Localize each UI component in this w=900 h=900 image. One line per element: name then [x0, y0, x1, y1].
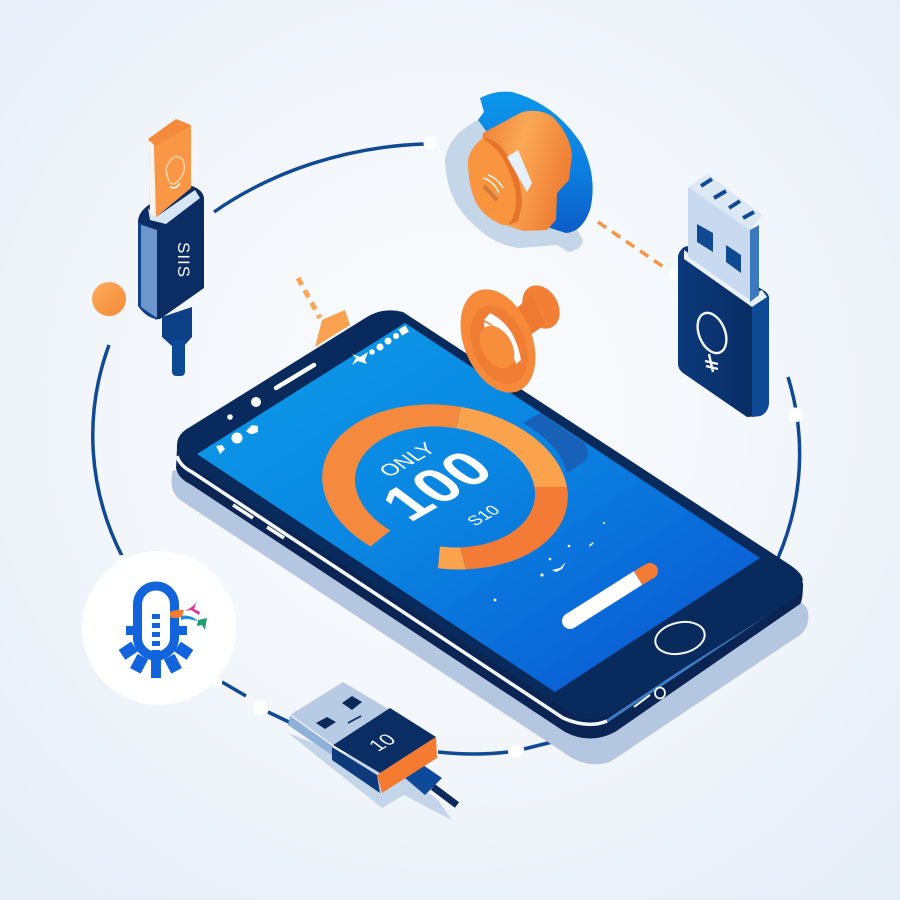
phone face — [177, 310, 803, 718]
smartphone — [176, 310, 803, 738]
connector label: SIIS — [174, 242, 193, 278]
side buttons — [233, 505, 284, 538]
female symbol on drive — [692, 309, 732, 372]
ring nodes — [253, 136, 802, 758]
icon: vertical USB connector — [138, 119, 204, 376]
knob shadow on screen — [523, 413, 588, 473]
icon: USB plug bottom — [288, 682, 457, 820]
phone edge highlight — [177, 456, 607, 724]
orange dashed link right — [598, 222, 665, 268]
orange node ball — [92, 282, 126, 316]
icon: orange knob — [446, 278, 567, 404]
orange connector behind phone — [298, 278, 350, 347]
colored cable flourish — [170, 610, 184, 618]
gauge ring — [296, 386, 594, 588]
plug label: 10 — [364, 731, 401, 755]
progress bar — [562, 563, 658, 629]
gauge text: ONLY — [374, 439, 441, 481]
screen — [197, 323, 760, 692]
gauge text: 100 — [367, 441, 507, 531]
earpiece and camera — [276, 365, 314, 388]
scattered sparks — [494, 522, 605, 601]
icon: white badge with chip — [82, 551, 236, 705]
phone shadow — [172, 470, 808, 764]
chip capsule — [138, 586, 174, 656]
connection ring — [93, 144, 800, 754]
icon: USB drive right — [678, 174, 769, 417]
phone side — [176, 320, 803, 738]
status icons — [216, 326, 409, 454]
home button — [652, 618, 708, 658]
audio jack — [655, 688, 665, 698]
gauge text: S10 — [463, 502, 504, 529]
icon: orange adapter on blue dome — [445, 92, 593, 252]
